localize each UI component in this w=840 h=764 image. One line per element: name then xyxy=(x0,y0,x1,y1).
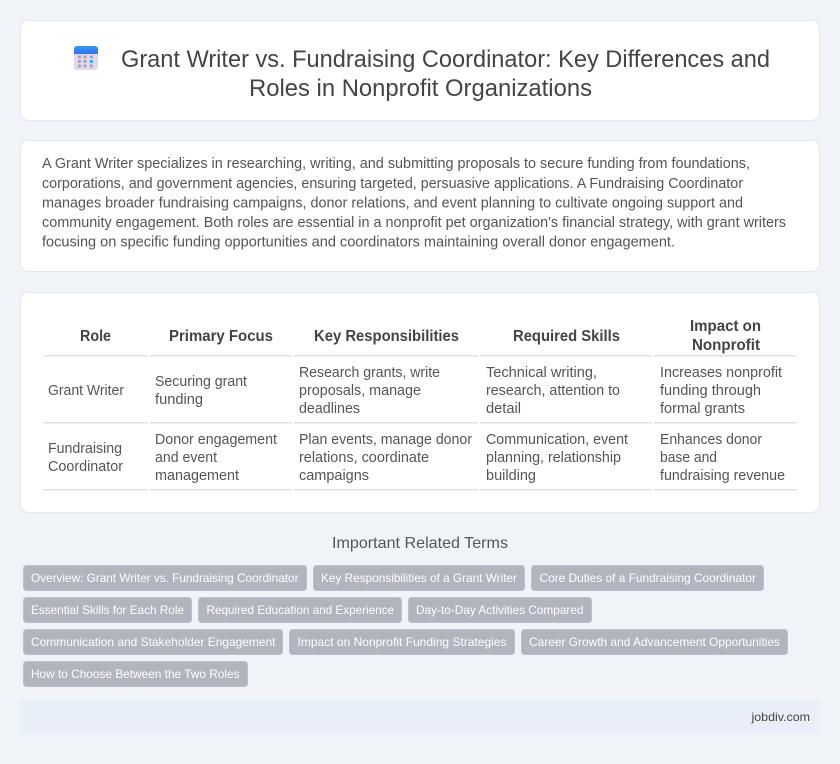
tag: Impact on Nonprofit Funding Strategies xyxy=(298,635,506,649)
table row: Grant Writer: funding through xyxy=(660,383,761,399)
table row: Fundraising Coordinator: Enhances donor xyxy=(660,432,762,448)
text block: summary: A Grant Writer specializes in researching, writing, and submitting proposals to secure funding from foundations, xyxy=(42,156,750,172)
tag xyxy=(24,630,282,654)
panel: comparison table xyxy=(20,292,820,512)
table row: Grant Writer: funding xyxy=(155,392,203,408)
title: Roles in Nonprofit Organizations xyxy=(249,75,592,102)
table row: Grant Writer: Grant Writer xyxy=(48,383,124,399)
text block: summary: corporations, and government agencies, ensuring targeted, persuasive applications. A Fundraising Coordinator xyxy=(42,176,743,192)
tag xyxy=(532,566,764,590)
table header row: Primary Focus xyxy=(169,328,273,345)
tag xyxy=(314,566,524,590)
tag: Core Duties of a Fundraising Coordinator xyxy=(540,571,756,585)
heading: important related terms: Important Related Terms xyxy=(332,535,508,552)
footer credit: jobdiv.com xyxy=(750,710,810,724)
table row: Grant Writer xyxy=(48,365,782,417)
table row: Fundraising Coordinator: Fundraising xyxy=(48,441,122,457)
tag: Key Responsibilities of a Grant Writer xyxy=(321,571,517,585)
table header row: Impact on xyxy=(690,318,761,335)
table header row: Key Responsibilities xyxy=(314,328,459,345)
tag xyxy=(198,598,402,622)
table row: Fundraising Coordinator: planning, relationship xyxy=(486,450,621,466)
table row: Fundraising Coordinator: relations, coordinate xyxy=(299,450,429,466)
footer xyxy=(20,700,820,734)
table row: Grant Writer: formal grants xyxy=(660,401,745,417)
tag: Required Education and Experience xyxy=(206,603,394,617)
text block: summary xyxy=(42,156,786,250)
tag: Overview: Grant Writer vs. Fundraising Coordinator xyxy=(31,571,298,585)
title: Grant Writer vs. Fundraising Coordinator: Key Differences and xyxy=(121,46,770,73)
table row: Grant Writer: Research grants, write xyxy=(299,365,440,381)
tag: Day-to-Day Activities Compared xyxy=(416,603,584,617)
panel: title header xyxy=(20,20,820,120)
table row: Fundraising Coordinator: Coordinator xyxy=(48,459,123,475)
table row: Fundraising Coordinator: management xyxy=(155,468,239,484)
table row: Fundraising Coordinator: Plan events, manage donor xyxy=(299,432,472,448)
table row: Fundraising Coordinator: Communication, event xyxy=(486,432,628,448)
table row: Grant Writer: deadlines xyxy=(299,401,360,417)
panel: summary paragraph xyxy=(20,140,820,272)
text block: summary: manages broader fundraising campaigns, donor relations, and event planning to cultivate ongoing support and xyxy=(42,196,743,212)
table header row: Role xyxy=(80,328,111,345)
tag: Career Growth and Advancement Opportunities xyxy=(529,635,780,649)
tag list: related terms xyxy=(24,566,788,686)
text block: summary: community engagement. Both roles are essential in a nonprofit pet organization's financial strategy, with grant writers xyxy=(42,215,786,231)
table row: Grant Writer: research, attention to xyxy=(486,383,620,399)
icon: calendar xyxy=(74,46,98,70)
title xyxy=(121,46,770,102)
table row: Fundraising Coordinator: Donor engagement xyxy=(155,432,277,448)
table row: Grant Writer: Technical writing, xyxy=(486,365,597,381)
table row: Grant Writer: Increases nonprofit xyxy=(660,365,782,381)
tag: How to Choose Between the Two Roles xyxy=(31,667,240,681)
table row: Grant Writer: Securing grant xyxy=(155,374,247,390)
tag xyxy=(24,662,248,686)
table row: Fundraising Coordinator: base and xyxy=(660,450,717,466)
table row: Grant Writer: proposals, manage xyxy=(299,383,421,399)
table header row: Required Skills xyxy=(513,328,620,345)
table header row xyxy=(80,318,761,354)
tag xyxy=(24,598,192,622)
tag xyxy=(290,630,514,654)
tag xyxy=(24,566,306,590)
table row: Fundraising Coordinator: building xyxy=(486,468,536,484)
tag xyxy=(522,630,788,654)
table row: Fundraising Coordinator: fundraising revenue xyxy=(660,468,785,484)
tag: Essential Skills for Each Role xyxy=(31,603,184,617)
table row: Fundraising Coordinator: and event xyxy=(155,450,217,466)
table header row: Nonprofit xyxy=(692,337,761,354)
tag xyxy=(408,598,592,622)
table row: Grant Writer: detail xyxy=(486,401,521,417)
tag: Communication and Stakeholder Engagement xyxy=(31,635,276,649)
table row: Fundraising Coordinator: campaigns xyxy=(299,468,369,484)
text block: summary: focusing on specific funding opportunities and coordinators maintaining overall donor engagement. xyxy=(42,234,675,250)
table row: Fundraising Coordinator xyxy=(48,432,785,484)
